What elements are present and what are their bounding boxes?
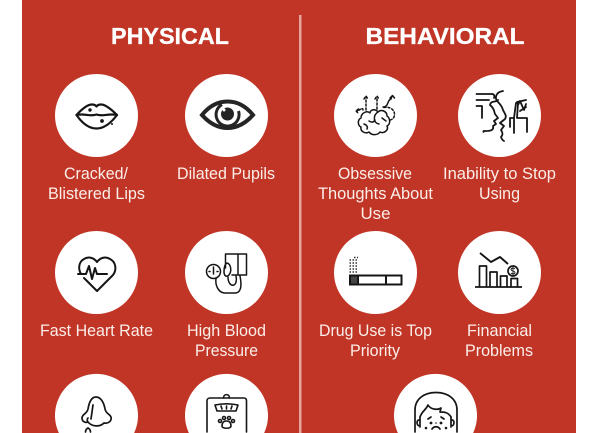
- label: Dilated Pupils: [177, 165, 275, 183]
- item: inability to stop: [443, 74, 556, 203]
- label: [465, 322, 533, 360]
- column divider: [299, 15, 302, 433]
- label: [48, 165, 145, 203]
- label: [319, 322, 432, 360]
- label: [443, 165, 556, 203]
- label: Obsessive: [338, 165, 412, 183]
- label: Problems: [465, 342, 533, 360]
- label: Blistered Lips: [48, 185, 145, 203]
- label: Thoughts About: [318, 185, 433, 203]
- icon: face with blemishes: [415, 392, 457, 432]
- item: obsessive thoughts: [318, 74, 433, 223]
- item: high blood pressure: [185, 231, 268, 360]
- heading: behavioral: BEHAVIORAL: [366, 23, 524, 49]
- label: Using: [479, 185, 520, 203]
- label: Fast Heart Rate: [40, 322, 153, 340]
- icon: nose with drip: [82, 397, 111, 432]
- label: Drug Use is Top: [319, 322, 432, 340]
- item: fast heart rate: [40, 231, 153, 340]
- label: Use: [360, 205, 390, 223]
- icon: blood pressure cuff: [206, 254, 246, 293]
- label: Cracked/: [64, 165, 128, 183]
- icon: heart with pulse: [78, 258, 115, 291]
- item: financial problems: [458, 231, 541, 360]
- icon: falling bar chart: [475, 253, 522, 287]
- icon: brain with arrows: [356, 96, 395, 135]
- item: cracked lips: [48, 74, 145, 203]
- label: Pressure: [195, 342, 258, 360]
- label: Financial: [467, 322, 532, 340]
- icon: eye: [202, 102, 253, 128]
- icon: lips: [76, 104, 117, 128]
- label: Priority: [350, 342, 401, 360]
- label: [187, 322, 266, 360]
- item: weight change: [185, 374, 268, 433]
- icon: cigarette with smoke: [350, 258, 402, 284]
- icon: scale with paw: [207, 395, 246, 432]
- heading: physical: PHYSICAL: [111, 23, 229, 49]
- label: Inability to Stop: [443, 165, 556, 183]
- label: [318, 165, 433, 223]
- item: dilated pupils: [177, 74, 275, 183]
- item: drug use top priority: [319, 231, 432, 360]
- label: High Blood: [187, 322, 266, 340]
- item: appearance change: [394, 374, 477, 433]
- item: runny nose: [55, 374, 138, 433]
- icon: faces and hand: [476, 91, 527, 141]
